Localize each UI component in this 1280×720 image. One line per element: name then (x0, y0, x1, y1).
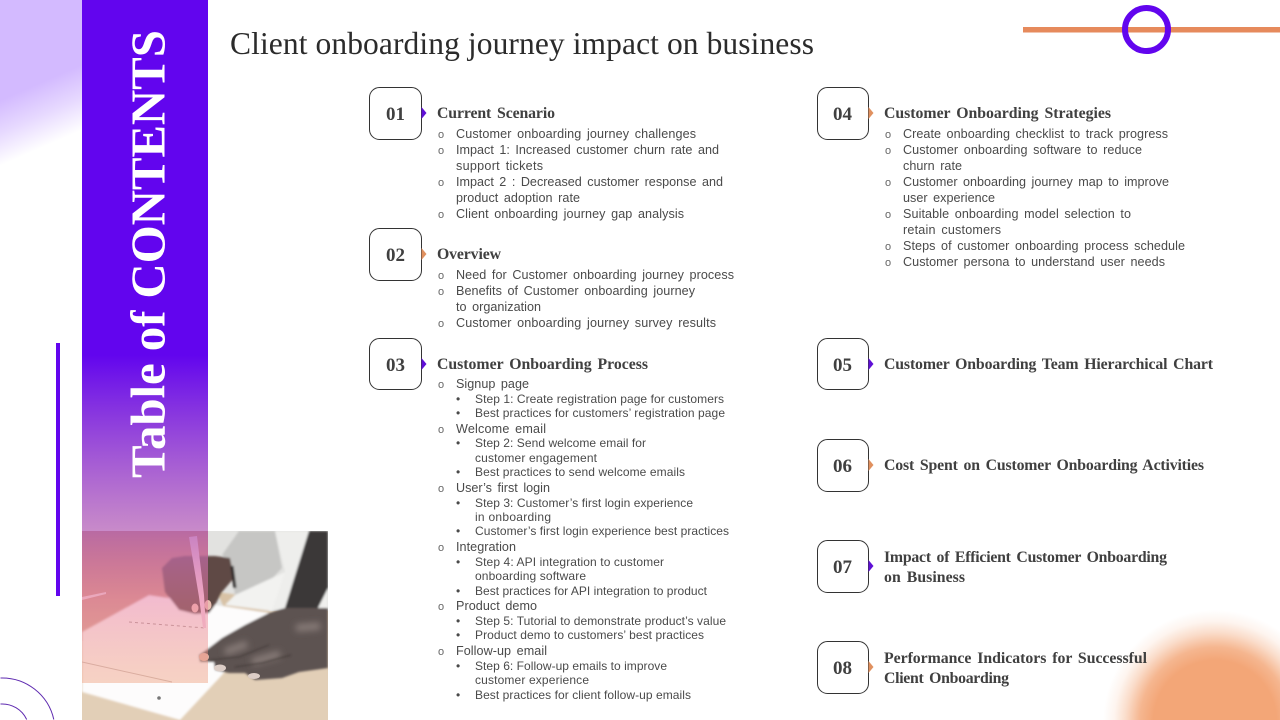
decorative concentric arcs (0, 678, 54, 720)
number badge 01: 01 (386, 104, 405, 125)
list 03: customer experience (475, 673, 589, 687)
list 03: Step 5: Tutorial to demonstrate product’s value (475, 614, 726, 628)
heading 05: Customer Onboarding Team Hierarchical Chart (884, 356, 1214, 373)
section 03: Customer Onboarding Process (370, 338, 729, 702)
list 03: Signup page (456, 377, 529, 391)
list 04: o (885, 241, 891, 253)
list 03: • (456, 465, 460, 479)
list 03: Step 1: Create registration page for customers (475, 392, 724, 406)
list 03: • (456, 688, 460, 702)
list 04: o (885, 177, 891, 189)
list 03: • (456, 614, 460, 628)
list 03: Best practices for customers’ registration page (475, 406, 725, 420)
vertical accent bar (56, 343, 60, 596)
list 03: • (456, 584, 460, 598)
list 02: o (438, 270, 444, 282)
section 07: Impact on Business (818, 540, 1167, 592)
list 03: o (438, 379, 444, 391)
section 05: Team Hierarchical Chart (818, 338, 1214, 390)
top-right ornament: orange line and purple ring (1023, 8, 1280, 51)
list 03: • (456, 436, 460, 450)
heading 03: Customer Onboarding Process (437, 356, 648, 373)
list 03: • (456, 555, 460, 569)
list 03: Best practices for client follow-up emails (475, 688, 691, 702)
number badge 06 (818, 440, 874, 492)
section 06: Cost Spent (818, 440, 1204, 492)
list 03: Product demo to customers’ best practices (475, 628, 704, 642)
heading 08: Performance Indicators for Successful (884, 650, 1148, 667)
list 03: • (456, 628, 460, 642)
list 04: Steps of customer onboarding process schedule (903, 239, 1185, 253)
sidebar heading: Table of CONTENTS: Table of CONTENTS (120, 30, 176, 478)
list 03: Step 3: Customer’s first login experience (475, 496, 693, 510)
section 01: Current Scenario (370, 88, 723, 221)
list 04: Customer onboarding software to reduce (903, 143, 1142, 157)
purple sidebar with gradient overlay (82, 0, 208, 683)
list 03: • (456, 659, 460, 673)
list 02 (438, 268, 734, 330)
list 01: o (438, 145, 444, 157)
list 04: Customer onboarding journey map to improve (903, 175, 1169, 189)
list 02: Benefits of Customer onboarding journey (456, 284, 696, 298)
number badge 07 (818, 540, 874, 592)
list 02: Customer onboarding journey survey results (456, 316, 716, 330)
list 04: o (885, 257, 891, 269)
heading 07: Impact of Efficient Customer Onboarding (884, 549, 1167, 566)
list 02: Need for Customer onboarding journey process (456, 268, 734, 282)
section 08: Performance Indicators (818, 642, 1148, 694)
list 03: Welcome email (456, 422, 546, 436)
list 03: • (456, 406, 460, 420)
page title: Client onboarding journey impact on business (230, 26, 814, 61)
heading 02: Overview (437, 246, 502, 263)
number badge 04 (818, 88, 874, 140)
list 03: Integration (456, 540, 516, 554)
list 03: • (456, 392, 460, 406)
list 03: Step 6: Follow-up emails to improve (475, 659, 667, 673)
number badge 05 (818, 338, 874, 390)
list 01: o (438, 177, 444, 189)
list 03: Step 2: Send welcome email for (475, 436, 646, 450)
list 03: Product demo (456, 599, 537, 613)
list 03: o (438, 601, 444, 613)
number badge 01 (370, 88, 426, 140)
list 03: o (438, 424, 444, 436)
list 04: user experience (903, 191, 995, 205)
list 03: • (456, 496, 460, 510)
list 01: Impact 1: Increased customer churn rate and (456, 143, 719, 157)
list 04 (885, 127, 1185, 269)
list 03: customer engagement (475, 451, 598, 465)
list 03: o (438, 542, 444, 554)
photo: hands signing a document (82, 531, 328, 720)
list 01: o (438, 129, 444, 141)
background gradient: top-left lilac glow (0, 0, 82, 168)
list 03: Follow-up email (456, 644, 547, 658)
section 04: Customer Onboarding Strategies (818, 88, 1185, 269)
list 04: o (885, 129, 891, 141)
list 01: Client onboarding journey gap analysis (456, 207, 684, 221)
heading 04: Customer Onboarding Strategies (884, 105, 1111, 122)
list 01: Customer onboarding journey challenges (456, 127, 696, 141)
number badge 02: 02 (386, 245, 405, 266)
number badge 03 (370, 338, 426, 390)
list 04: Create onboarding checklist to track progress (903, 127, 1168, 141)
list 03: Best practices for API integration to product (475, 584, 708, 598)
list 04: Suitable onboarding model selection to (903, 207, 1131, 221)
heading 06: Cost Spent on Customer Onboarding Activities (884, 457, 1204, 474)
heading 08 (884, 650, 1148, 687)
number badge 07: 07 (833, 557, 852, 578)
list 01: Impact 2 : Decreased customer response and (456, 175, 723, 189)
list 02: o (438, 318, 444, 330)
list 03: o (438, 483, 444, 495)
background gradient: bottom-right orange glow (1095, 605, 1280, 720)
list 03: Step 4: API integration to customer (475, 555, 664, 569)
list 03 (438, 377, 729, 702)
list 01: product adoption rate (456, 191, 580, 205)
number badge 03: 03 (386, 355, 405, 376)
list 04: o (885, 209, 891, 221)
list 02: to organization (456, 300, 541, 314)
list 02: o (438, 286, 444, 298)
list 03: Best practices to send welcome emails (475, 465, 685, 479)
number badge 08 (818, 642, 874, 694)
list 04: o (885, 145, 891, 157)
section 02: Overview (370, 228, 734, 330)
list 01 (438, 127, 723, 221)
number badge 04: 04 (833, 104, 852, 125)
list 01: support tickets (456, 159, 543, 173)
number badge 08: 08 (833, 658, 852, 679)
list 03: • (456, 524, 460, 538)
list 01: o (438, 209, 444, 221)
heading 07: on Business (884, 569, 965, 586)
list 04: Customer persona to understand user needs (903, 255, 1165, 269)
heading 07 (884, 549, 1167, 586)
list 04: retain customers (903, 223, 1001, 237)
heading 01: Current Scenario (437, 105, 555, 122)
number badge 02 (370, 228, 426, 280)
list 03: Customer’s first login experience best practices (475, 524, 729, 538)
heading 08: Client Onboarding (884, 670, 1009, 687)
list 03: User’s first login (456, 481, 550, 495)
list 03: in onboarding (475, 510, 551, 524)
list 04: churn rate (903, 159, 962, 173)
list 03: o (438, 646, 444, 658)
number badge 05: 05 (833, 355, 852, 376)
number badge 06: 06 (833, 456, 852, 477)
list 03: onboarding software (475, 569, 586, 583)
